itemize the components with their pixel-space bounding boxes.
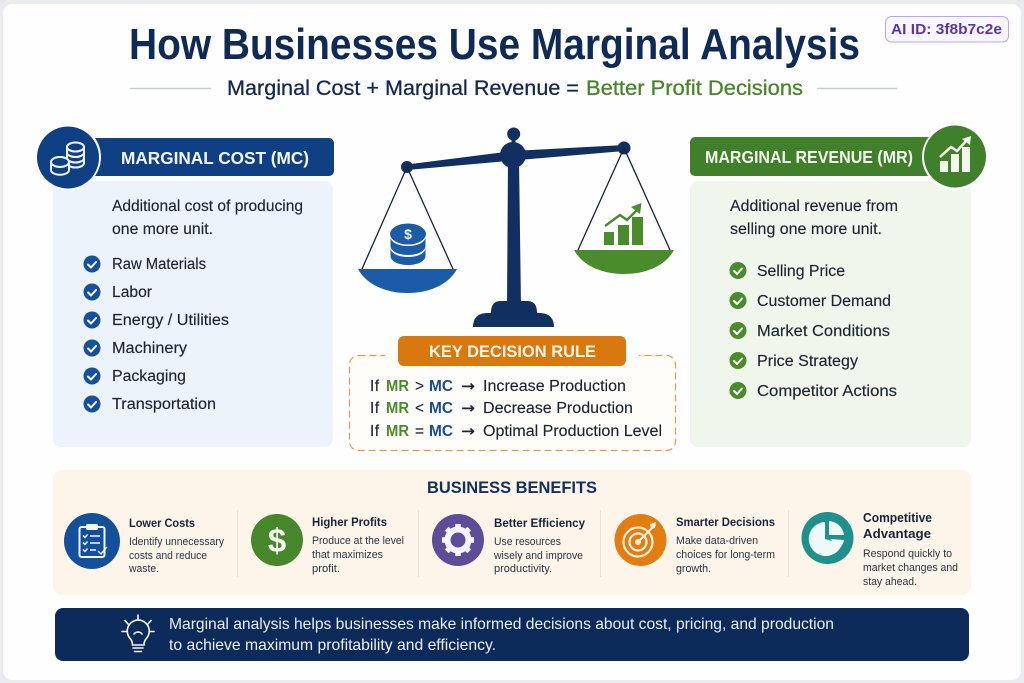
rule: increase: → — [461, 377, 475, 395]
left pan with coins: $ — [404, 226, 412, 242]
benefit: better efficiency: Better Efficiency — [494, 516, 585, 530]
AI ID badge — [886, 16, 1008, 42]
benefit: higher profits — [251, 514, 404, 575]
rule: optimal: MR — [386, 423, 409, 440]
benefit: smarter decisions — [614, 514, 775, 575]
benefit: smarter decisions: Make data-driven — [676, 535, 758, 547]
benefit: higher profits: Higher Profits — [312, 515, 387, 529]
rule: decrease: Decrease Production — [483, 400, 633, 417]
benefit: smarter decisions: growth. — [676, 563, 711, 575]
key decision rule heading: KEY DECISION RULE — [429, 342, 596, 361]
icon: coin stacks — [35, 124, 101, 190]
marginal cost definition: Additional cost of producing — [112, 198, 303, 215]
benefit: better efficiency: wisely and improve — [493, 550, 583, 562]
icon: light bulb — [122, 615, 154, 652]
icon: pie chart — [802, 512, 854, 564]
marginal revenue checklist: Competitor Actions — [757, 383, 897, 400]
marginal cost header — [90, 138, 334, 176]
rule: decrease: < — [415, 400, 424, 417]
conclusion banner — [55, 608, 969, 661]
benefit: competitive advantage: Competitive — [863, 511, 932, 525]
benefit: lower costs: waste. — [128, 563, 159, 575]
rule: increase: Increase Production — [483, 378, 626, 395]
marginal cost checklist: Packaging — [112, 368, 186, 385]
marginal revenue definition — [730, 198, 898, 238]
rule: optimal: = — [415, 423, 424, 440]
panel: business benefits — [53, 470, 971, 595]
marginal cost definition — [112, 198, 303, 238]
icon: clipboard — [64, 513, 120, 569]
business benefits heading: BUSINESS BENEFITS — [427, 478, 597, 497]
benefit: competitive advantage: stay ahead. — [863, 576, 917, 588]
subtitle: Marginal Cost + Marginal Revenue = — [227, 76, 579, 100]
benefit: higher profits: that maximizes — [312, 549, 384, 561]
balance scale illustration — [358, 128, 674, 327]
marginal cost checklist: Energy / Utilities — [112, 312, 229, 329]
icon: target — [614, 514, 666, 566]
panel: marginal cost — [35, 124, 334, 447]
panel: marginal revenue — [690, 124, 988, 447]
marginal cost definition: one more unit. — [112, 221, 213, 238]
rule: decrease: → — [461, 399, 475, 417]
marginal revenue checklist: Customer Demand — [757, 293, 891, 310]
rule: increase: MR — [386, 378, 409, 395]
benefit: competitive advantage: Advantage — [863, 527, 931, 541]
marginal cost checklist: Raw Materials — [112, 256, 206, 273]
rule: optimal: MC — [429, 423, 453, 440]
benefit: lower costs: Lower Costs — [129, 516, 195, 530]
rule: decrease: MC — [429, 400, 453, 417]
marginal cost header: MARGINAL COST (MC) — [121, 148, 309, 168]
icon: growth chart — [922, 124, 988, 190]
marginal cost checklist: Labor — [112, 284, 152, 301]
marginal revenue definition: selling one more unit. — [730, 221, 882, 238]
right pan with chart — [574, 148, 674, 274]
key decision rule box — [350, 336, 676, 450]
key decision rule heading — [385, 336, 639, 366]
marginal revenue checklist: Selling Price — [757, 263, 845, 280]
scale stand and beam — [401, 128, 630, 327]
benefit: competitive advantage — [802, 511, 958, 588]
rule: increase — [370, 377, 626, 395]
icon: dollar: $ — [268, 522, 286, 559]
marginal revenue checklist: Market Conditions — [757, 323, 890, 340]
marginal revenue checklist: Price Strategy — [757, 353, 858, 370]
conclusion text: Marginal analysis helps businesses make informed decisions about cost, pricing, and production — [169, 616, 834, 633]
benefit: lower costs — [64, 513, 225, 575]
benefit: better efficiency — [432, 514, 585, 575]
rule: decrease — [370, 399, 633, 417]
benefit: better efficiency: Use resources — [494, 536, 562, 548]
rule: decrease: If — [370, 400, 380, 417]
rule: decrease: MR — [386, 400, 409, 417]
benefit: better efficiency: productivity. — [494, 563, 552, 575]
conclusion text: to achieve maximum profitability and efficiency. — [169, 637, 496, 654]
title: How Businesses Use Marginal Analysis — [129, 20, 860, 69]
subtitle: Better Profit Decisions — [586, 76, 803, 100]
marginal cost checklist: Machinery — [112, 340, 187, 357]
benefit: competitive advantage: Respond quickly to — [863, 548, 952, 560]
icon: dollar — [251, 514, 303, 566]
benefit: higher profits: profit. — [312, 563, 340, 575]
icon: gear — [432, 514, 484, 566]
marginal revenue definition: Additional revenue from — [730, 198, 898, 215]
benefit: higher profits: Produce at the level — [312, 535, 404, 547]
marginal revenue checklist — [730, 262, 897, 400]
benefit: smarter decisions: choices for long-term — [676, 549, 775, 561]
rule: increase: > — [415, 378, 424, 395]
rule: optimal: → — [461, 422, 475, 440]
rule: increase: If — [370, 378, 380, 395]
rule: optimal: If — [370, 423, 380, 440]
marginal cost checklist — [84, 256, 229, 413]
conclusion text — [169, 616, 834, 654]
rule: increase: MC — [429, 378, 453, 395]
AI ID badge: AI ID: 3f8b7c2e — [891, 22, 1002, 38]
subtitle — [130, 76, 897, 100]
rule: optimal: Optimal Production Level — [483, 423, 662, 440]
benefit: smarter decisions: Smarter Decisions — [676, 515, 775, 529]
marginal revenue header: MARGINAL REVENUE (MR) — [705, 147, 913, 167]
left pan with coins — [358, 167, 457, 293]
benefit: lower costs: Identify unnecessary — [129, 536, 225, 548]
marginal cost checklist: Transportation — [112, 396, 216, 413]
benefit: competitive advantage: market changes and — [863, 562, 958, 574]
rule: optimal — [370, 422, 662, 440]
benefit: lower costs: costs and reduce — [129, 550, 207, 562]
marginal revenue header — [690, 137, 935, 176]
